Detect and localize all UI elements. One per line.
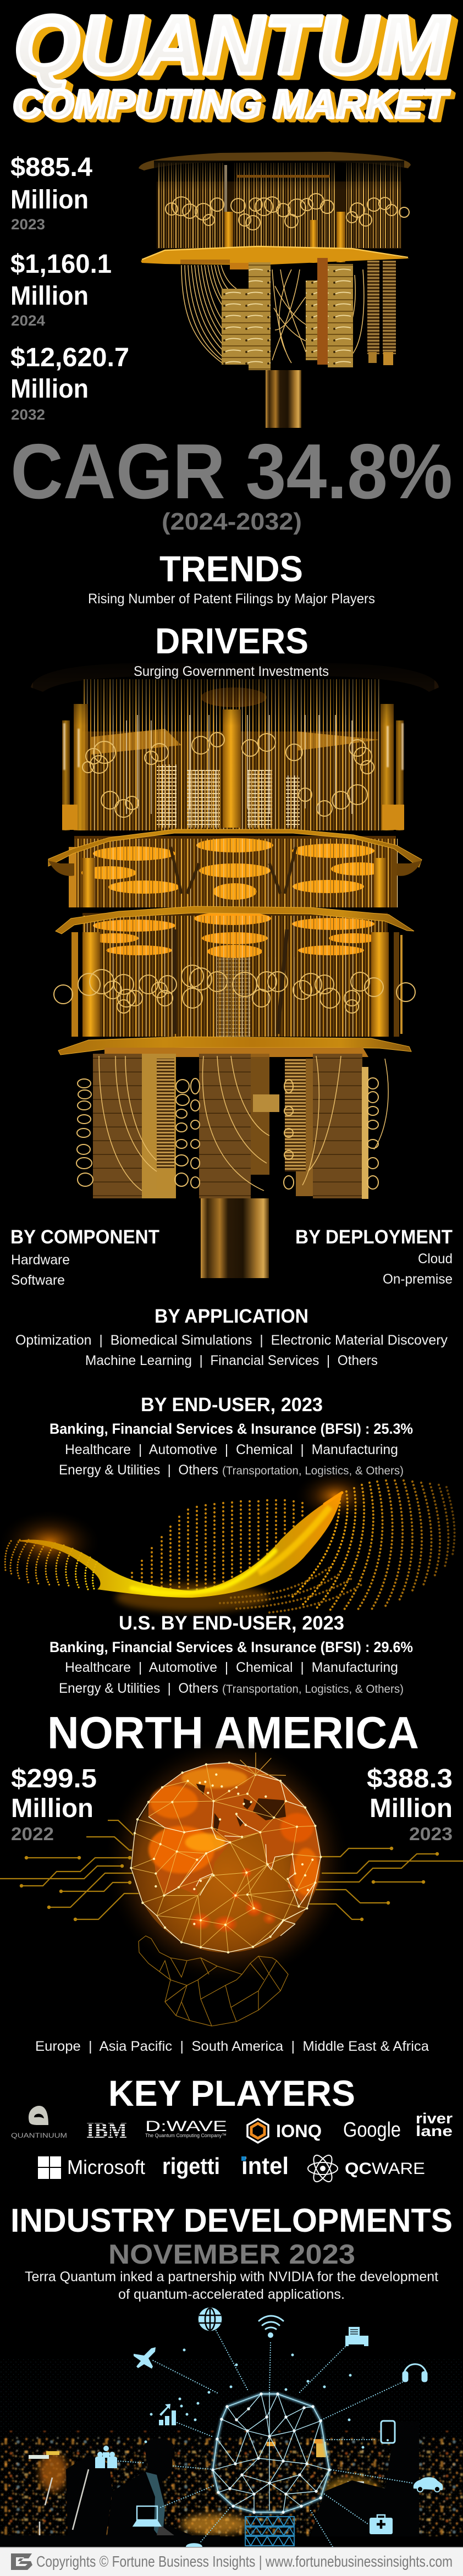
end-user items: Energy & Utilities | Others <box>59 1462 218 1478</box>
stat: 2023 value: Million <box>370 1794 453 1823</box>
other regions: Europe | Asia Pacific | South America | Middle East & Africa <box>35 2039 429 2054</box>
logo: Intel: intel <box>241 2153 289 2179</box>
stat: 2023 value: $388.3 <box>367 1764 453 1793</box>
application items: Optimization | Biomedical Simulations | Electronic Material Discovery <box>15 1333 448 1348</box>
image: golden particle wave <box>0 1469 455 1612</box>
application items: Machine Learning | Financial Services | Others <box>85 1353 378 1368</box>
title line: Quantum: QUANTUM <box>14 0 450 92</box>
end-user items: Healthcare | Automotive | Chemical | Manufacturing <box>65 1442 398 1457</box>
logo: D-Wave: D:WAVE <box>145 2118 227 2134</box>
icon: wifi <box>259 2316 283 2338</box>
connecting lines <box>118 2330 412 2547</box>
mid columns <box>132 1500 302 1592</box>
icon: car <box>414 2477 443 2492</box>
band 2 lenses <box>89 912 378 958</box>
server stack <box>245 2517 294 2546</box>
stat: 2023 value <box>367 1764 453 1844</box>
icon: medical kit <box>370 2515 393 2534</box>
U.S. end-user items: Energy & Utilities | Others <box>59 1681 218 1696</box>
logo: Riverlane <box>416 2110 453 2139</box>
development date: NOVEMBER 2023 <box>108 2239 355 2270</box>
development description: of quantum-accelerated applications. <box>118 2287 345 2302</box>
heading: Key Players: KEY PLAYERS <box>108 2073 355 2113</box>
by component: BY COMPONENT <box>10 1226 159 1248</box>
U.S. end-user items <box>59 1660 404 1696</box>
warm underlay <box>82 731 379 830</box>
logo: IBM: IBM <box>86 2118 127 2143</box>
leading segment: Banking, Financial Services & Insurance (BFSI) : 25.3% <box>49 1421 413 1437</box>
stat: 2022 value: $299.5 <box>11 1764 97 1793</box>
panel: market size statistics <box>10 153 129 423</box>
stat 2024 <box>10 250 112 329</box>
by component <box>10 1226 159 1288</box>
stat: 2023 value: 2023 <box>409 1824 453 1844</box>
development description <box>25 2269 438 2302</box>
logo: IonQ <box>247 2119 322 2143</box>
left fan <box>5 1540 97 1590</box>
logos: key players <box>11 2106 453 2184</box>
icon: bulb top <box>186 2543 202 2547</box>
CAGR period: (2024-2032) <box>162 508 302 535</box>
logo: Microsoft <box>38 2156 145 2179</box>
by end-user: BY END-USER, 2023 <box>141 1394 323 1416</box>
sparkles <box>146 2350 363 2447</box>
icon: printer <box>345 2327 368 2347</box>
stat 2023: 2023 <box>11 216 45 233</box>
end-user items <box>59 1442 404 1478</box>
footer logo <box>11 2553 32 2570</box>
logo: D-Wave: The Quantum Computing Company™ <box>145 2133 227 2139</box>
drivers: DRIVERS <box>155 620 308 661</box>
drivers <box>134 620 329 679</box>
wireframe hand <box>139 1936 288 2026</box>
band 1 lenses <box>81 838 386 900</box>
warm underlay, band 2 <box>82 913 388 1037</box>
deployment items <box>383 1251 453 1287</box>
icon: laptop <box>134 2506 161 2526</box>
logo: QC Ware <box>308 2153 425 2184</box>
end-user items: (Transportation, Logistics, & Others) <box>222 1465 404 1477</box>
image: brain network over night city <box>0 2308 463 2547</box>
circuit lines <box>0 1820 463 1919</box>
illustration: network globe in hand <box>0 1738 463 2026</box>
by application: BY APPLICATION <box>155 1306 308 1327</box>
title line: Computing Market: COMPUTING MARKET <box>13 82 450 126</box>
leading U.S. segment: Banking, Financial Services & Insurance (BFSI) : 29.6% <box>49 1639 413 1655</box>
by deployment <box>295 1226 453 1287</box>
deployment items: On-premise <box>383 1272 453 1287</box>
stat 2024: $1,160.1 <box>10 250 112 279</box>
right ribs <box>220 1480 455 1612</box>
by deployment: BY DEPLOYMENT <box>295 1226 453 1248</box>
icon: people <box>95 2446 117 2468</box>
stat: 2022 value <box>11 1764 97 1844</box>
stat 2024: 2024 <box>11 312 45 329</box>
title <box>13 0 450 126</box>
logo: Google: Google <box>343 2118 401 2142</box>
logo: Riverlane: lane <box>416 2123 453 2139</box>
icon: globe <box>199 2308 221 2330</box>
trends text: Rising Number of Patent Filings by Major Players <box>88 591 375 607</box>
heading: North America: NORTH AMERICA <box>47 1707 419 1758</box>
globe body, drawn in crop coordinates <box>131 1753 321 1952</box>
neural brain <box>213 2392 329 2512</box>
stat 2032 <box>10 343 129 423</box>
warm underlay, band 1 <box>74 836 396 907</box>
stat 2023: Million <box>10 185 89 214</box>
city lights <box>0 2431 463 2539</box>
heading: Industry Developments: INDUSTRY DEVELOPMENTS <box>10 2202 453 2239</box>
icon: headphones <box>403 2364 427 2381</box>
icon: growth chart <box>159 2404 176 2425</box>
stat: 2022 value: Million <box>11 1794 93 1823</box>
globe wireframe <box>131 1763 321 1952</box>
stat 2023 <box>10 153 92 233</box>
logo: Microsoft: Microsoft <box>67 2156 145 2178</box>
icon: smartphone <box>381 2421 395 2443</box>
component items: Software <box>11 1273 65 1288</box>
trends <box>88 548 375 607</box>
stat 2024: Million <box>10 282 89 311</box>
drivers text: Surging Government Investments <box>134 664 329 679</box>
stat 2023: $885.4 <box>10 153 92 182</box>
stat: 2022 value: 2022 <box>11 1824 54 1844</box>
by end-user <box>49 1394 413 1478</box>
U.S. end-user items: Healthcare | Automotive | Chemical | Manufacturing <box>65 1660 398 1675</box>
logo: IonQ: IONQ <box>276 2121 322 2141</box>
stat 2032: Million <box>10 375 89 404</box>
deployment items: Cloud <box>418 1251 453 1267</box>
logo: D-Wave <box>145 2118 227 2139</box>
U.S. end-user items: (Transportation, Logistics, & Others) <box>222 1683 404 1696</box>
component items <box>11 1252 70 1288</box>
component items: Hardware <box>11 1252 70 1268</box>
silhouettes of people <box>66 2421 419 2547</box>
stat 2032: 2032 <box>11 406 45 423</box>
U.S. by end-user <box>49 1612 413 1696</box>
logo: Riverlane: river <box>416 2110 453 2127</box>
by application <box>15 1306 448 1368</box>
logo: Quantinuum <box>11 2106 67 2139</box>
application items <box>15 1333 448 1368</box>
continents <box>148 1763 321 1903</box>
development description: Terra Quantum inked a partnership with NVIDIA for the development <box>25 2269 438 2285</box>
logo: QC Ware: QCWARE <box>345 2160 425 2178</box>
trends: TRENDS <box>159 548 303 589</box>
logo: Quantinuum: QUANTINUUM <box>11 2132 67 2139</box>
U.S. by end-user: U.S. BY END-USER, 2023 <box>119 1612 344 1634</box>
stat 2032: $12,620.7 <box>10 343 129 372</box>
footer <box>0 2547 463 2576</box>
image: quantum computer, main <box>31 663 439 1278</box>
image: quantum computer, top <box>139 152 411 428</box>
yellow ribbon <box>16 1494 342 1598</box>
icon: airplane <box>134 2347 156 2369</box>
logo: Rigetti: rigetti <box>162 2153 220 2179</box>
